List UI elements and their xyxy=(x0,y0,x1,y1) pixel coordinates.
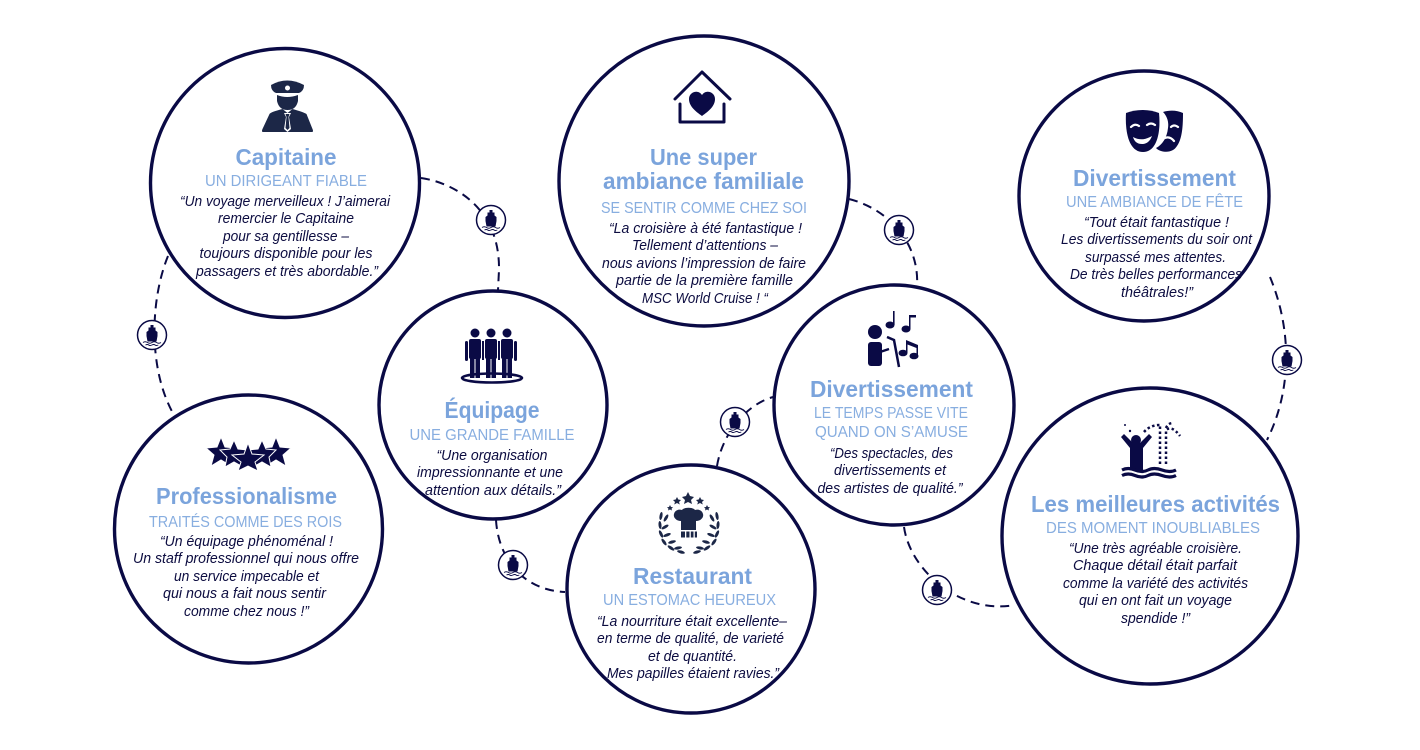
quote: spectacles: “Des spectacles, des xyxy=(830,446,953,462)
ship badge 2 xyxy=(138,320,166,350)
panel: Équipage xyxy=(379,291,607,519)
quote: Professionalisme: un service impecable et xyxy=(174,569,320,585)
dashed connector: Restaurant to Divertissement xyxy=(717,397,773,466)
heading: Divertissement: Divertissement xyxy=(810,376,973,402)
panel: Restaurant xyxy=(567,465,815,713)
quote: Capitaine: remercier le Capitaine xyxy=(218,211,354,227)
quote: fête: De très belles performances xyxy=(1070,267,1242,283)
panel: Professionalisme xyxy=(114,395,382,663)
subheading: le temps passe vite xyxy=(814,405,968,441)
icon: theatre masks xyxy=(1126,110,1183,152)
quote: Équipage: attention aux détails.” xyxy=(425,483,562,499)
heading: Une super ambiance familiale: ambiance familiale xyxy=(603,168,804,194)
dashed connector: Capitaine to Professionalisme xyxy=(154,256,174,415)
quote: Restaurant: en terme de qualité, de varieté xyxy=(597,631,784,647)
subheading: fête: UNE AMBIANCE DE FÊTE xyxy=(1066,192,1243,211)
quote: ambiance: partie de la première famille xyxy=(615,273,793,289)
subheading: le temps passe vite: LE TEMPS PASSE VITE xyxy=(814,405,968,422)
quote: fête: surpassé mes attentes. xyxy=(1085,250,1226,266)
ship badge 3 xyxy=(498,550,528,580)
quote: ambiance: MSC World Cruise ! “ xyxy=(642,291,769,307)
heading: activités: Les meilleures activités xyxy=(1031,491,1280,517)
quote: Restaurant: et de quantité. xyxy=(648,649,737,665)
subheading: le temps passe vite: QUAND ON S’AMUSE xyxy=(815,424,968,441)
quote: fête xyxy=(1061,215,1253,301)
quote: Équipage: “Une organisation xyxy=(436,448,548,464)
ship badge 7 xyxy=(1272,346,1302,374)
icon: person in water with fountain xyxy=(1121,423,1180,477)
quote: activités: spendide !” xyxy=(1121,611,1191,627)
quote: Capitaine: passagers et très abordable.” xyxy=(195,264,379,280)
quote: Équipage xyxy=(417,448,563,499)
icon: chef hat with laurel xyxy=(658,492,720,554)
subheading: ambiance: SE SENTIR COMME CHEZ SOI xyxy=(601,200,807,217)
quote: activités: comme la variété des activités xyxy=(1063,576,1248,592)
panel: Les meilleures activités xyxy=(1002,388,1298,684)
quote: Professionalisme: “Un équipage phénoménal ! xyxy=(160,534,333,550)
quote: activités xyxy=(1063,541,1248,627)
ship badge 4 xyxy=(720,408,750,436)
quote: Capitaine: toujours disponible pour les xyxy=(200,246,372,262)
quote: Professionalisme xyxy=(133,534,359,620)
dashed connector: Équipage to Restaurant xyxy=(496,520,565,592)
quote: ambiance: “La croisière à été fantastique ! xyxy=(609,221,802,237)
panel: Divertissement, le temps passe vite xyxy=(774,285,1014,525)
icon: captain xyxy=(262,80,313,132)
quote: spectacles: divertissements et xyxy=(834,463,947,479)
quote: Capitaine: “Un voyage merveilleux ! J’aimerai xyxy=(180,194,391,210)
panel: Divertissement, une ambiance de fête xyxy=(1019,71,1269,321)
subheading: Professionalisme: TRAITÉS COMME DES ROIS xyxy=(149,512,342,531)
quote: Restaurant: “La nourriture était excellente– xyxy=(597,614,788,630)
heading: Restaurant: Restaurant xyxy=(633,563,752,589)
heading: Professionalisme: Professionalisme xyxy=(156,483,337,509)
quote: activités: Chaque détail était parfait xyxy=(1073,558,1238,574)
quote: Capitaine xyxy=(180,194,391,280)
quote: Professionalisme: qui nous a fait nous sentir xyxy=(163,586,327,602)
subheading: Capitaine: UN DIRIGEANT FIABLE xyxy=(205,173,367,190)
subheading: Restaurant: UN ESTOMAC HEUREUX xyxy=(603,592,776,609)
dashed connector: Divertissement to activités xyxy=(904,527,1015,606)
subheading: Équipage: UNE GRANDE FAMILLE xyxy=(410,427,574,444)
icon: house with heart xyxy=(675,72,730,122)
quote: Restaurant xyxy=(597,614,788,682)
quote: ambiance xyxy=(602,221,806,307)
quote: Capitaine: pour sa gentillesse – xyxy=(222,229,350,245)
quote: activités: qui en ont fait un voyage xyxy=(1079,593,1232,609)
heading: Une super ambiance familiale: Une super xyxy=(650,144,757,170)
subheading: activités: DES MOMENT INOUBLIABLES xyxy=(1046,520,1260,537)
heading: Capitaine: Capitaine xyxy=(236,144,336,170)
quote: Professionalisme: comme chez nous !” xyxy=(184,604,310,620)
quote: ambiance: nous avions l’impression de faire xyxy=(602,256,806,272)
dashed connector: Divertissement fête to activités xyxy=(1267,277,1286,440)
heading: Équipage: Équipage xyxy=(444,396,540,423)
icon: singer and music notes xyxy=(868,311,918,367)
dashed connector: ambiance to Divertissement xyxy=(849,199,917,287)
quote: fête: théâtrales!” xyxy=(1121,285,1194,301)
quote: spectacles xyxy=(818,446,964,497)
dashed connector: Capitaine to Équipage xyxy=(421,178,499,290)
panel: Une super ambiance familiale xyxy=(559,36,849,326)
icon: three crew members xyxy=(462,328,522,382)
ship badge 5 xyxy=(884,216,914,244)
quote: Restaurant: Mes papilles étaient ravies.” xyxy=(607,666,780,682)
heading: Une super ambiance familiale xyxy=(603,144,804,194)
quote: fête: “Tout était fantastique ! xyxy=(1084,215,1229,231)
ship badge 6 xyxy=(922,576,952,604)
icon: five stars xyxy=(206,437,291,471)
panel: Capitaine xyxy=(150,48,420,318)
quote: Équipage: impressionnante et une xyxy=(417,465,563,481)
ship badge 1 xyxy=(476,206,506,234)
quote: Professionalisme: Un staff professionnel qui nous offre xyxy=(133,551,359,567)
quote: fête: Les divertissements du soir ont xyxy=(1061,232,1253,248)
quote: activités: “Une très agréable croisière. xyxy=(1069,541,1242,557)
quote: ambiance: Tellement d’attentions – xyxy=(632,238,779,254)
heading: Divertissement: Divertissement xyxy=(1073,165,1236,191)
quote: spectacles: des artistes de qualité.” xyxy=(818,481,964,497)
